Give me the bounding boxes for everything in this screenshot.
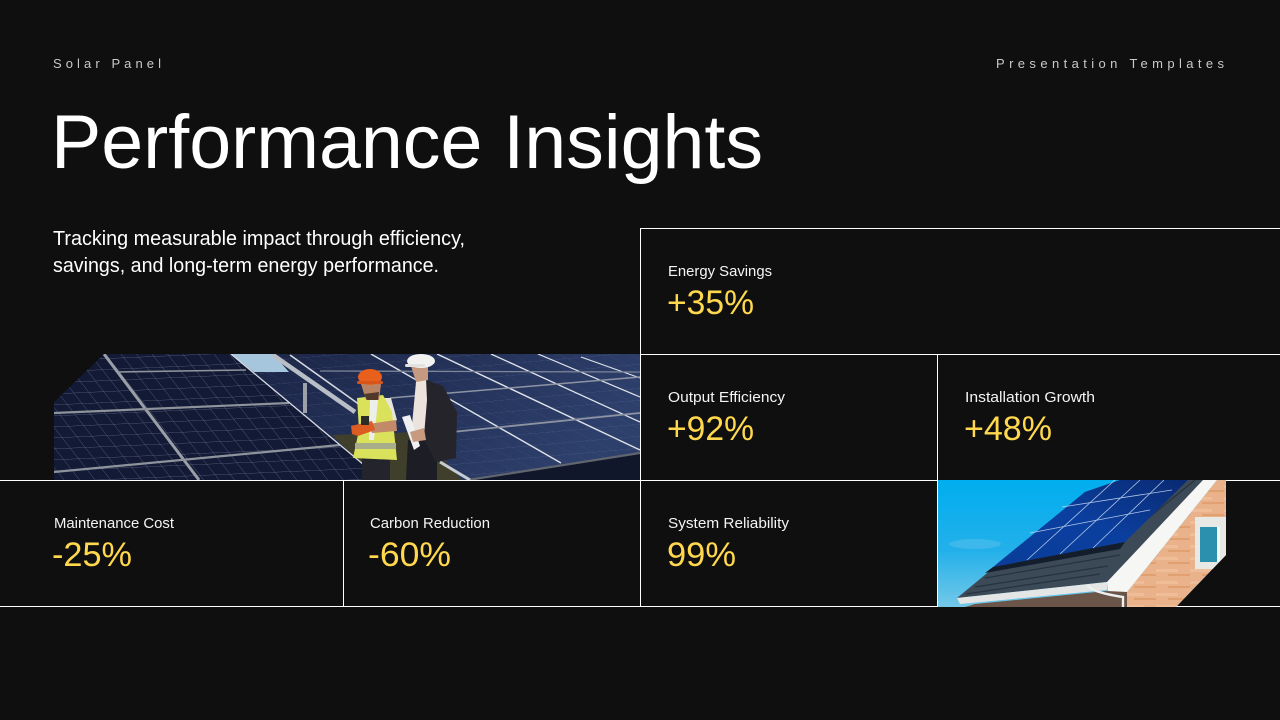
panel: carbon reduction [344,481,640,606]
icon: rooftop solar array [985,480,1188,573]
value: 99%: 99% [667,536,736,574]
image: engineers inspecting a solar panel field [54,354,640,480]
value: -25%: -25% [52,536,132,574]
panel: installation growth [938,355,1280,480]
panel: maintenance cost [0,481,343,606]
label: maintenance cost: Maintenance Cost [54,515,175,532]
value: +92%: +92% [667,410,754,448]
icon: worker in orange helmet and safety vest [351,369,397,480]
panel: energy savings [641,229,1280,354]
icon: brick wall and window [1127,480,1226,607]
header label: Presentation Templates: Presentation Templates [996,56,1224,71]
subtitle text block: savings, and long-term energy performance. [53,255,439,277]
label: system reliability: System Reliability [668,515,790,532]
value: +48%: +48% [964,410,1052,448]
icon: engineer in white helmet and dark suit [402,354,457,480]
label: energy savings: Energy Savings [668,263,772,280]
header label: Solar Panel: Solar Panel [53,56,161,71]
panel: system reliability [641,481,937,606]
title: Performance Insights [51,100,763,185]
subtitle text block [53,228,465,277]
subtitle text block: Tracking measurable impact through efficiency, [53,228,465,250]
image: house roof with solar panels [938,480,1226,607]
panel: output efficiency [641,355,937,480]
value: +35%: +35% [667,284,754,322]
label: carbon reduction: Carbon Reduction [370,515,490,532]
label: installation growth: Installation Growth [965,389,1095,406]
icon: shingled roof [957,480,1205,598]
label: output efficiency: Output Efficiency [668,389,786,406]
value: -60%: -60% [368,536,451,574]
